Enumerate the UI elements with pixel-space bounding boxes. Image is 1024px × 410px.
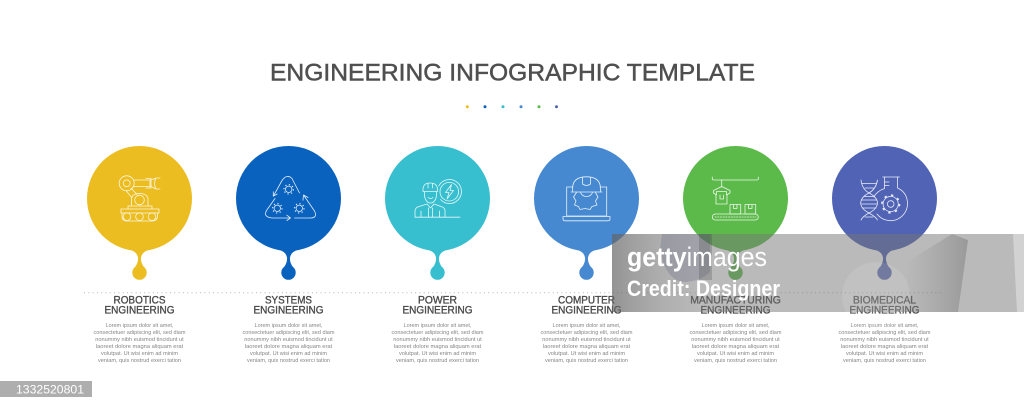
heading: ENGINEERING xyxy=(402,304,472,316)
marker: cyan drop circle xyxy=(385,146,490,280)
stock id tag xyxy=(0,381,92,397)
icon: conveyor with boxes xyxy=(712,177,758,220)
body text: laoreet dolore magna aliquam erat xyxy=(394,344,482,350)
body text: volutpat. Ut wisi enim ad minim xyxy=(548,351,625,357)
body text: volutpat. Ut wisi enim ad minim xyxy=(101,351,178,357)
heading xyxy=(104,294,174,316)
heading xyxy=(850,294,920,316)
watermark credit: Credit: Designer xyxy=(627,276,780,301)
body text xyxy=(690,323,782,364)
watermark logo: gettyimages xyxy=(627,242,767,272)
heading: BIOMEDICAL xyxy=(853,294,916,306)
body text xyxy=(94,323,186,364)
body text: Lorem ipsum dolor sit amet, xyxy=(404,323,472,329)
icon: engineer with power symbol xyxy=(415,180,461,217)
panel: systems engineering xyxy=(236,146,341,364)
heading: ROBOTICS xyxy=(114,294,166,306)
panel: power engineering xyxy=(385,146,490,364)
heading xyxy=(254,294,324,316)
heading: ENGINEERING xyxy=(552,304,622,316)
heading: ENGINEERING xyxy=(104,304,174,316)
heading xyxy=(690,294,781,316)
body text: Lorem ipsum dolor sit amet, xyxy=(552,323,621,329)
body text: laoreet dolore magna aliquam erat xyxy=(543,344,631,350)
marker: mid blue drop circle xyxy=(534,146,639,280)
body text: nonummy nibh euismod tincidunt ut xyxy=(542,337,631,343)
heading: POWER xyxy=(418,294,457,306)
body text: laoreet dolore magna aliquam erat xyxy=(96,344,184,350)
heading: ENGINEERING xyxy=(850,304,920,316)
body text: consectetuer adipiscing elit, sed diam xyxy=(392,330,484,336)
body text xyxy=(242,323,335,364)
body text: veniam, quis nostrud exerci tation xyxy=(694,358,777,364)
title: ENGINEERING INFOGRAPHIC TEMPLATE xyxy=(270,60,755,86)
body text: veniam, quis nostrud exerci tation xyxy=(98,358,181,364)
title accent dots xyxy=(466,105,558,108)
marker: green drop circle xyxy=(683,146,788,280)
body text: laoreet dolore magna aliquam erat xyxy=(245,344,333,350)
body text: Lorem ipsum dolor sit amet, xyxy=(106,323,174,329)
body text: Lorem ipsum dolor sit amet, xyxy=(254,323,323,329)
body text: consectetuer adipiscing elit, sed diam xyxy=(94,330,186,336)
body text: volutpat. Ut wisi enim ad minim xyxy=(250,351,327,357)
panel: robotics engineering xyxy=(87,146,192,364)
body text xyxy=(540,323,633,364)
heading: ENGINEERING xyxy=(254,304,324,316)
body text: nonummy nibh euismod tincidunt ut xyxy=(393,337,482,343)
body text: Lorem ipsum dolor sit amet, xyxy=(702,323,770,329)
heading: SYSTEMS xyxy=(265,294,312,306)
marker: indigo drop circle xyxy=(832,146,937,280)
body text: laoreet dolore magna aliquam erat xyxy=(841,344,929,350)
panel: biomedical engineering xyxy=(832,146,937,364)
body text: volutpat. Ut wisi enim ad minim xyxy=(697,351,774,357)
icon: recycling gears xyxy=(266,176,316,220)
body text: veniam, quis nostrud exerci tation xyxy=(247,358,330,364)
body text: nonummy nibh euismod tincidunt ut xyxy=(244,337,333,343)
body text: veniam, quis nostrud exerci tation xyxy=(843,358,926,364)
body text xyxy=(392,323,484,364)
panel: manufacturing engineering xyxy=(683,146,788,364)
body text: volutpat. Ut wisi enim ad minim xyxy=(399,351,476,357)
body text: volutpat. Ut wisi enim ad minim xyxy=(846,351,923,357)
body text xyxy=(838,323,931,364)
stock id tag: 1332520801 xyxy=(16,382,84,396)
body text: Lorem ipsum dolor sit amet, xyxy=(850,323,919,329)
marker: yellow drop circle xyxy=(87,146,192,280)
body text: consectetuer adipiscing elit, sed diam xyxy=(838,330,931,336)
icon: robot arm xyxy=(119,176,160,221)
body text: nonummy nibh euismod tincidunt ut xyxy=(95,337,184,343)
heading xyxy=(552,294,622,316)
body text: veniam, quis nostrud exerci tation xyxy=(396,358,479,364)
heading: COMPUTER xyxy=(558,294,615,306)
body text: consectetuer adipiscing elit, sed diam xyxy=(242,330,335,336)
body text: veniam, quis nostrud exerci tation xyxy=(545,358,628,364)
body text: consectetuer adipiscing elit, sed diam xyxy=(690,330,782,336)
watermark band xyxy=(612,234,1024,330)
heading xyxy=(402,294,472,316)
icon: DNA and flask with gear xyxy=(861,177,908,221)
marker: blue drop circle xyxy=(236,146,341,280)
body text: nonummy nibh euismod tincidunt ut xyxy=(840,337,929,343)
body text: consectetuer adipiscing elit, sed diam xyxy=(540,330,633,336)
heading: MANUFACTURING xyxy=(690,294,781,306)
panel: computer engineering xyxy=(534,146,639,364)
heading: ENGINEERING xyxy=(700,304,770,316)
body text: nonummy nibh euismod tincidunt ut xyxy=(691,337,780,343)
body text: laoreet dolore magna aliquam erat xyxy=(692,344,780,350)
icon: laptop with helmet and gear xyxy=(563,177,610,221)
